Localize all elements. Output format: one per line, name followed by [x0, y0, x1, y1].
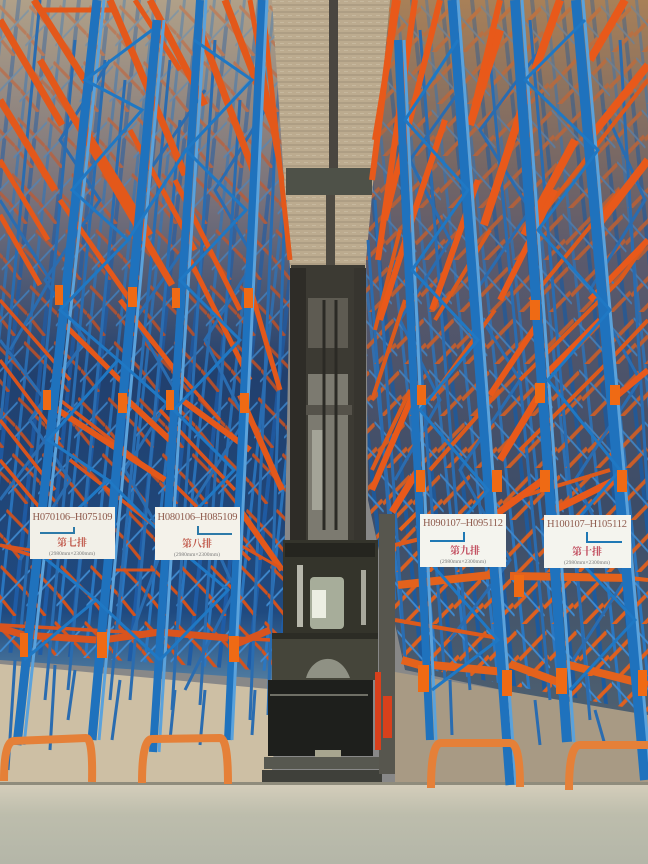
sign: eighth row: (2980mm×2300mm): [174, 551, 220, 558]
side pole: [379, 514, 395, 774]
right rack backdrop: [366, 0, 648, 720]
sign: eighth row: H080106–H085109: [158, 512, 238, 523]
left lower orange beams: [0, 545, 284, 645]
right upper orange beams: [372, 0, 648, 515]
sign: eighth row: [155, 507, 240, 560]
left front diagonal bracing: [24, 30, 252, 660]
sign: ninth row: [420, 514, 506, 567]
sign: tenth row: [544, 515, 631, 568]
right lower orange beams: [398, 510, 648, 685]
sign: seventh row: [30, 507, 115, 559]
sign: eighth row: 第八排: [182, 537, 212, 550]
left rear orange beams: [0, 300, 270, 640]
warehouse floor: [0, 660, 648, 864]
ceiling: [270, 0, 395, 280]
right rear blue uprights and bracing: [368, 20, 648, 720]
right front diagonal bracing: [405, 20, 635, 690]
left rear blue uprights and bracing: [0, 0, 285, 720]
sign: ninth row: 第九排: [450, 544, 480, 557]
forklift glass guard: [272, 633, 378, 680]
sign: tenth row: H100107–H105112: [547, 519, 627, 530]
forklift mast: [290, 265, 366, 545]
forklift: [262, 265, 395, 782]
right rear orange beams: [372, 80, 648, 640]
sign: tenth row: (2980mm×2300mm): [564, 559, 610, 566]
forklift base: [262, 680, 382, 782]
orange upright connector plates: [20, 285, 647, 696]
sign: seventh row: 第七排: [57, 536, 87, 549]
sign: tenth row: 第十排: [572, 545, 602, 558]
sign: ninth row: H090107–H095112: [423, 518, 503, 529]
left upper orange beams: [0, 0, 290, 570]
red safety panel: [375, 672, 392, 750]
sign: seventh row: H070106–H075109: [32, 512, 112, 523]
forklift cab: [283, 540, 378, 640]
left front blue uprights: [17, 0, 267, 752]
sign: seventh row: (2980mm×2300mm): [49, 550, 95, 557]
left rack backdrop: [0, 0, 290, 680]
sign: ninth row: (2980mm×2300mm): [440, 558, 486, 565]
orange floor guard rails: [4, 738, 648, 790]
right front blue uprights: [398, 0, 648, 785]
